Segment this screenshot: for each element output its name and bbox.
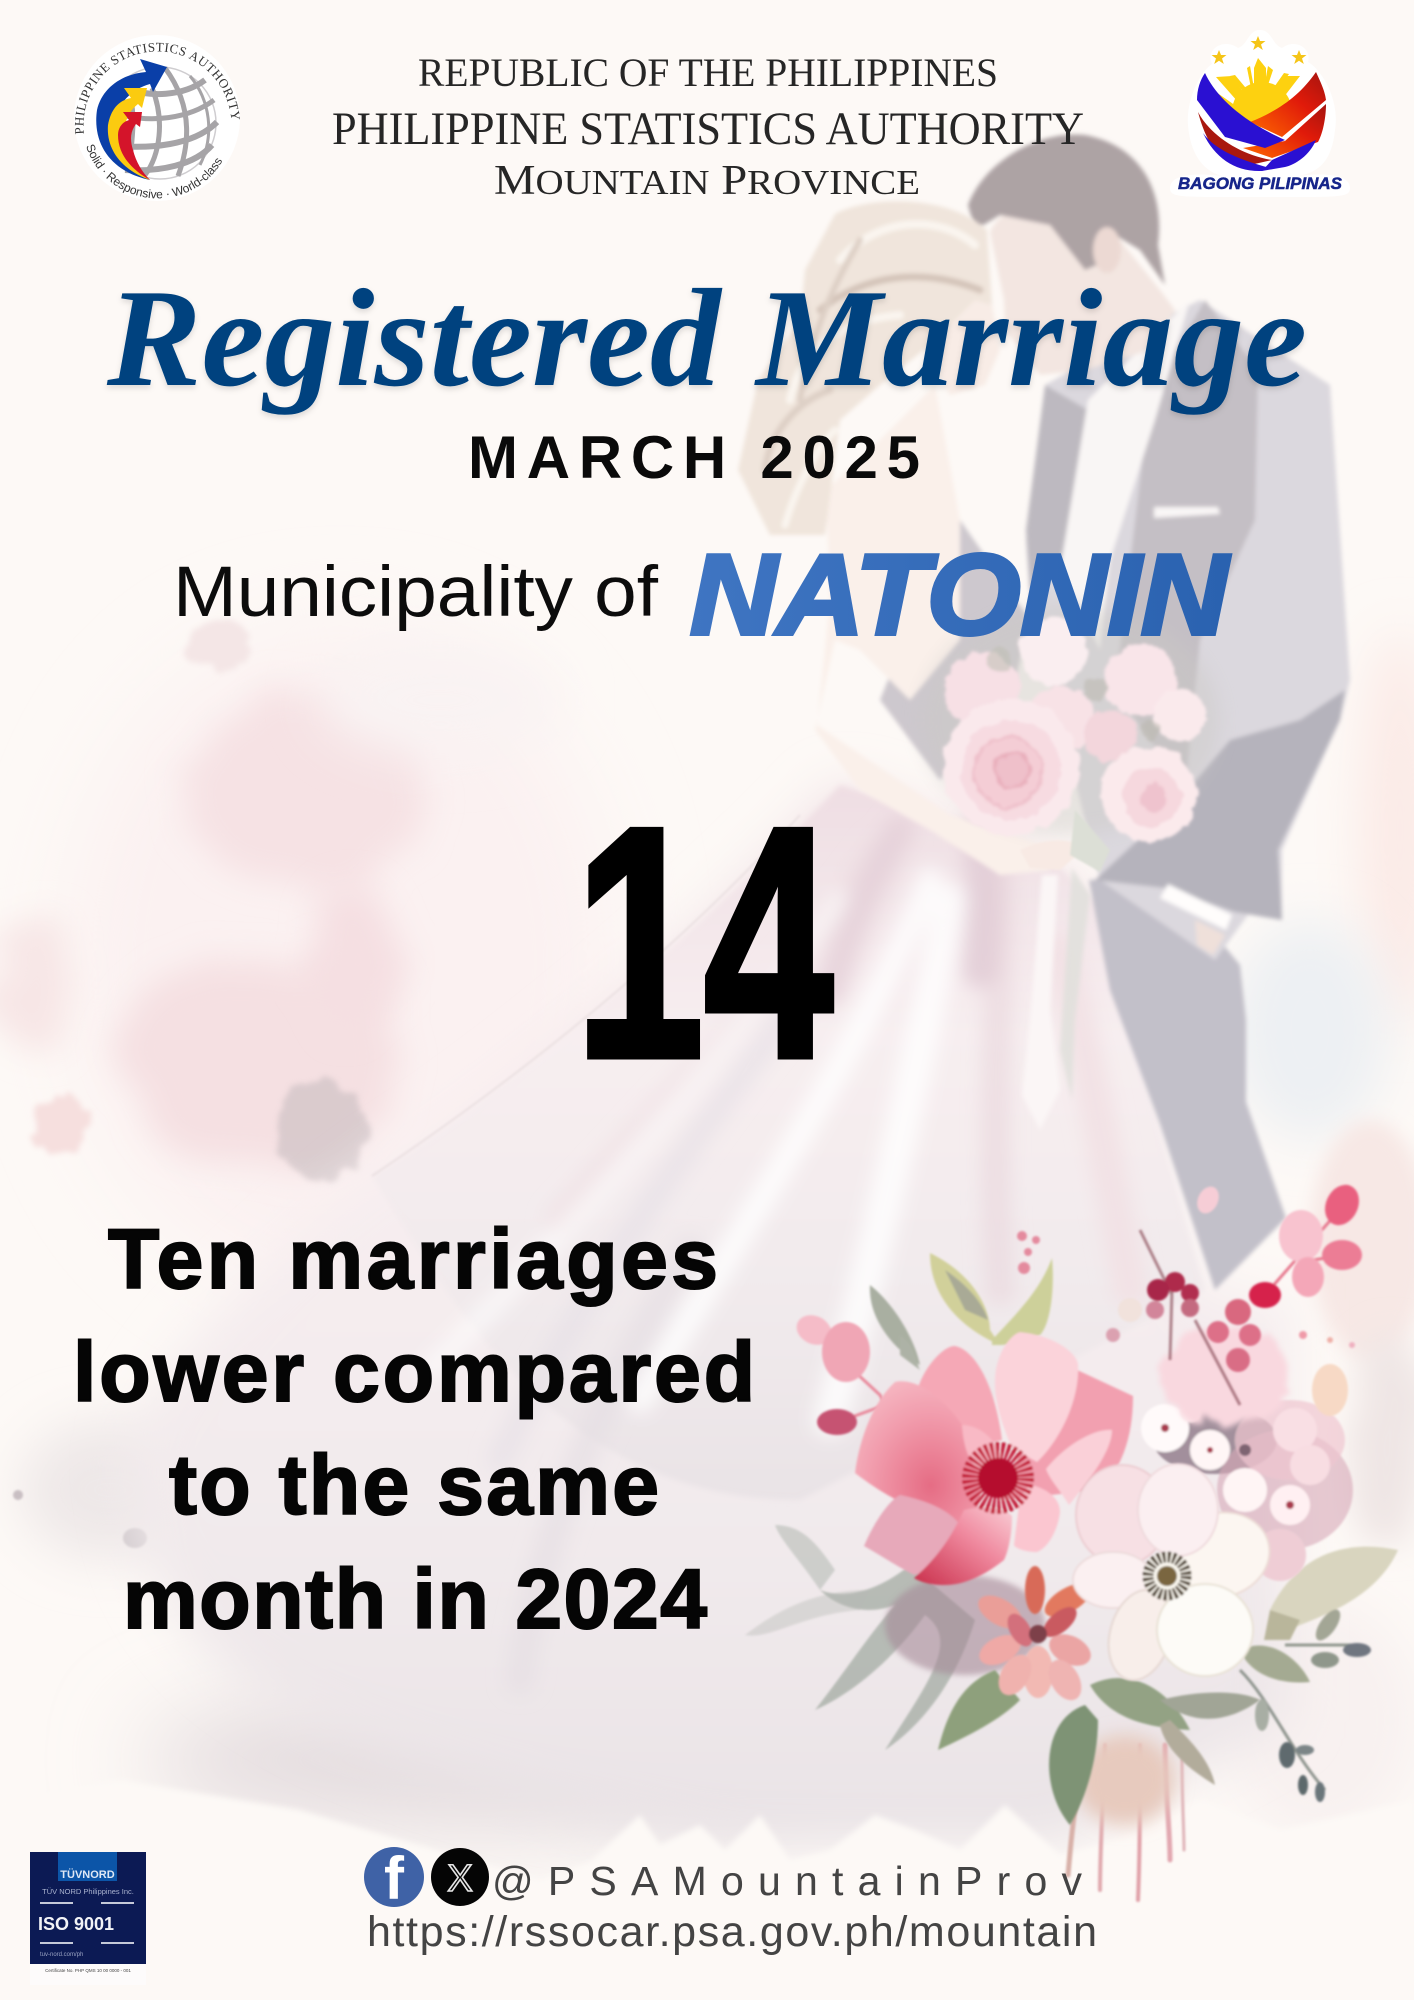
small rose (1101, 746, 1197, 842)
province line: MOUNTAIN PROVINCE (494, 158, 920, 204)
social handle: @PSAMountainProv (492, 1858, 1082, 1904)
logo wordmark: BAGONG PILIPINAS (1178, 175, 1342, 193)
ISO 9001 badge: TÜV NORD Philippines Inc. (42, 1887, 134, 1896)
municipality label: Municipality of (173, 553, 658, 632)
groom sleeve and cuff (1095, 690, 1345, 955)
berries and buds (1017, 1179, 1365, 1416)
background rose bouquet (920, 605, 1220, 872)
main number: 14 (575, 759, 834, 1126)
icon: X (431, 1848, 489, 1906)
website link: https://rssocar.psa.gov.ph/mountain (367, 1908, 1097, 1956)
stars (1212, 36, 1306, 64)
line two: lower compared (73, 1325, 755, 1419)
groom shirt (1060, 300, 1190, 650)
watercolor wash background (0, 621, 1414, 1840)
logo motto text: Solid · Responsive · World-class (86, 144, 222, 198)
hand on stems (1020, 840, 1085, 870)
bouquet drips (1068, 1735, 1184, 1900)
red swoosh (1250, 72, 1326, 137)
pocket square (1154, 507, 1220, 518)
groom neck and face (990, 203, 1175, 375)
small white blossoms (1141, 1399, 1353, 1581)
icon: X: X (447, 1858, 473, 1900)
white anemone (1073, 1464, 1279, 1687)
bride shoulder and arm (815, 385, 1050, 875)
large rose (943, 699, 1079, 835)
pink peony (855, 1332, 1133, 1585)
authority line: PHILIPPINE STATISTICS AUTHORITY (332, 103, 1084, 155)
groom jacket (1026, 300, 1350, 960)
bride hair (738, 201, 992, 535)
line four: month in 2024 (123, 1552, 707, 1646)
floral bouquet (745, 1179, 1398, 1900)
bride gown skirt (129, 785, 1290, 1845)
lower purple shade (885, 1575, 1045, 1675)
bottom green leaves (938, 1670, 1260, 1825)
date subtitle: MARCH 2025 (468, 424, 920, 491)
coral small flower (973, 1566, 1097, 1706)
groom hair (968, 134, 1165, 285)
comparison statement (73, 1212, 755, 1646)
groom trousers (1089, 880, 1286, 1290)
ribbons (1022, 868, 1090, 1130)
peony stamens (971, 1451, 1025, 1505)
gray foliage left (745, 1525, 975, 1750)
line one: Ten marriages (108, 1212, 718, 1306)
header: agency text (332, 50, 1084, 204)
blue swoosh (1197, 73, 1285, 148)
groom ear (1093, 227, 1121, 273)
line three: to the same (169, 1438, 659, 1532)
logo ring text: PHILIPPINE STATISTICS AUTHORITY (74, 42, 240, 134)
ISO 9001 badge: TÜVNORD (60, 1868, 115, 1881)
bride figure (738, 201, 1050, 875)
gown streaks (430, 830, 1130, 1680)
globe (104, 67, 217, 179)
title: Registered Marriage (106, 261, 1307, 416)
sun (1216, 58, 1301, 128)
top olive leaves (870, 1253, 1053, 1370)
bride face (925, 300, 1000, 395)
bride bodice shadow (880, 520, 1030, 780)
header: PSA logo (74, 35, 240, 201)
icon: Facebook (364, 1845, 424, 1912)
ISO 9001 badge (30, 1852, 146, 1985)
yellow arrow (108, 88, 150, 180)
ISO 9001 badge: ISO 9001 (38, 1914, 114, 1934)
left pink sprigs (792, 1310, 885, 1435)
ISO 9001 badge: Certificate No. PHP QMS 10 00 0000 - 001 (45, 1968, 131, 1973)
couple illustration (129, 134, 1350, 1845)
blue arrow (96, 59, 167, 180)
torn watercolor lower edge (0, 1780, 1414, 2000)
pink wash cluster (1160, 1325, 1290, 1425)
right olive leaves and sprigs (1240, 1547, 1398, 1802)
municipality name: NATONIN (690, 532, 1231, 659)
red arrow (118, 112, 150, 180)
republic line: REPUBLIC OF THE PHILIPPINES (418, 50, 998, 95)
header: Bagong Pilipinas logo (1170, 30, 1350, 197)
icon: Facebook: f (384, 1845, 405, 1912)
ISO 9001 badge: tuv-nord.com/ph (40, 1952, 83, 1958)
groom figure (968, 134, 1350, 1290)
